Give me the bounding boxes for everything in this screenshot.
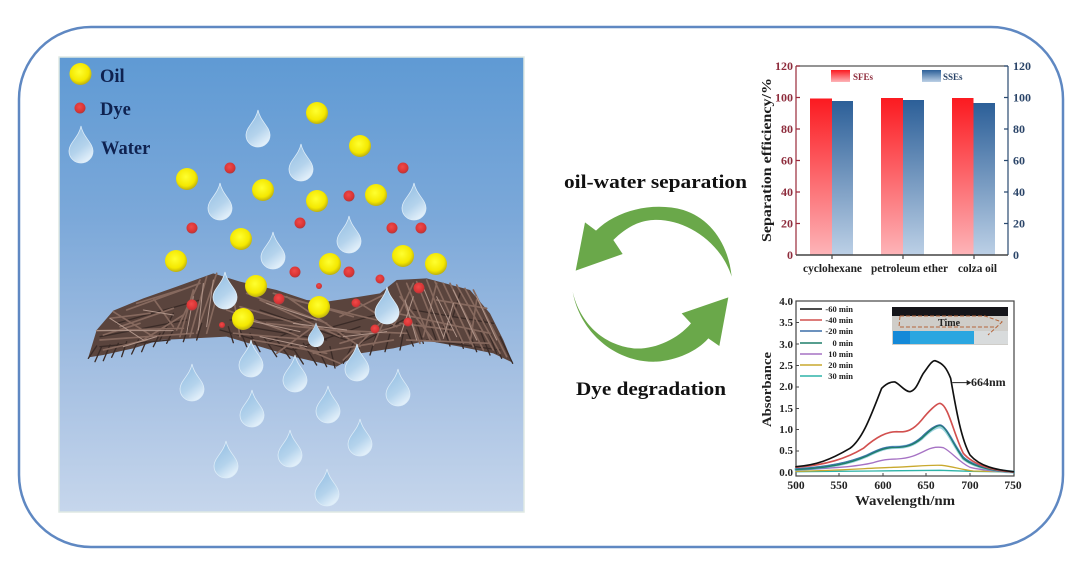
y axis labels: 2.5 bbox=[779, 360, 794, 372]
x axis title: Wavelength/nm bbox=[855, 493, 956, 508]
x axis labels bbox=[787, 480, 1022, 492]
left axis labels: 60 bbox=[781, 154, 793, 168]
y axis labels bbox=[779, 296, 794, 479]
x axis labels: 500 bbox=[787, 480, 805, 492]
x axis labels: 650 bbox=[917, 480, 935, 492]
y axis labels: 4.0 bbox=[779, 296, 794, 308]
chart legend: SSEs bbox=[943, 72, 963, 82]
right axis labels: 120 bbox=[1013, 59, 1031, 73]
category labels: colza oil bbox=[958, 263, 997, 275]
y axis title: Absorbance bbox=[759, 352, 774, 427]
y axis labels: 2.0 bbox=[779, 381, 794, 393]
y axis labels: 1.0 bbox=[779, 424, 794, 436]
inset photo: decolourising samples bbox=[892, 307, 1008, 345]
legend: time series: 0 min bbox=[832, 338, 853, 348]
x axis labels: 750 bbox=[1004, 480, 1022, 492]
right axis labels: 40 bbox=[1013, 185, 1025, 199]
bars bbox=[810, 98, 995, 255]
right axis labels bbox=[1013, 59, 1031, 262]
plot frame and ticks bbox=[796, 66, 1008, 259]
heading: dye degradation: Dye degradation bbox=[576, 379, 726, 400]
tick marks bbox=[796, 322, 970, 476]
water drops bbox=[180, 110, 426, 506]
legend: time series: 30 min bbox=[828, 371, 853, 381]
sky background bbox=[59, 57, 524, 512]
left axis labels: 80 bbox=[781, 122, 793, 136]
legend: oil: Oil bbox=[100, 67, 125, 87]
left axis labels: 0 bbox=[787, 248, 793, 262]
legend: time series: -60 min bbox=[825, 304, 853, 314]
right axis labels: 80 bbox=[1013, 122, 1025, 136]
y axis labels: 0.5 bbox=[779, 445, 794, 457]
bar chart: separation efficiency bbox=[760, 59, 1031, 275]
plot frame bbox=[796, 301, 1014, 476]
left axis labels: 20 bbox=[781, 216, 793, 230]
y axis title: Separation efficiency/% bbox=[760, 78, 775, 242]
category labels bbox=[803, 263, 997, 275]
y axis labels: 3.0 bbox=[779, 339, 794, 351]
peak label: 664nm bbox=[971, 375, 1006, 389]
chart legend: SFEs bbox=[853, 72, 874, 82]
legend: time series: -40 min bbox=[825, 315, 853, 325]
arrows: green cycle bbox=[573, 207, 732, 362]
legend: time series bbox=[800, 304, 853, 381]
y axis labels: 0.0 bbox=[779, 467, 794, 479]
right axis labels: 100 bbox=[1013, 90, 1031, 104]
left axis labels: 100 bbox=[775, 90, 793, 104]
legend: dye: Dye bbox=[100, 100, 131, 120]
heading: oil-water separation: oil-water separation bbox=[564, 172, 747, 193]
y axis labels: 3.5 bbox=[779, 317, 794, 329]
panel: oil dye water filtration scene bbox=[59, 57, 524, 512]
arrow: bottom, pointing right bbox=[573, 292, 728, 362]
left axis labels: 40 bbox=[781, 185, 793, 199]
right axis labels: 60 bbox=[1013, 154, 1025, 168]
legend: time series: -20 min bbox=[825, 326, 853, 336]
category labels: cyclohexane bbox=[803, 263, 862, 275]
left axis labels: 120 bbox=[775, 59, 793, 73]
line chart: absorbance spectra bbox=[759, 296, 1022, 508]
x axis labels: 600 bbox=[874, 480, 892, 492]
chart legend bbox=[831, 70, 963, 82]
legend bbox=[69, 63, 150, 163]
dye particles bbox=[186, 162, 426, 334]
y axis labels: 1.5 bbox=[779, 403, 794, 415]
oil droplets bbox=[165, 102, 447, 330]
fibrous membrane bbox=[88, 273, 513, 368]
right axis labels: 0 bbox=[1013, 248, 1019, 262]
legend: water: Water bbox=[101, 139, 150, 159]
legend: time series: 10 min bbox=[828, 349, 853, 359]
category labels: petroleum ether bbox=[871, 263, 948, 275]
left axis labels bbox=[775, 59, 793, 262]
legend: time series: 20 min bbox=[828, 360, 853, 370]
x axis labels: 700 bbox=[961, 480, 979, 492]
x axis labels: 550 bbox=[830, 480, 848, 492]
inset photo: decolourising samples: Time bbox=[938, 318, 961, 329]
right axis labels: 20 bbox=[1013, 216, 1025, 230]
spectra curves bbox=[796, 361, 1013, 472]
arrow: top, pointing left bbox=[576, 207, 732, 277]
